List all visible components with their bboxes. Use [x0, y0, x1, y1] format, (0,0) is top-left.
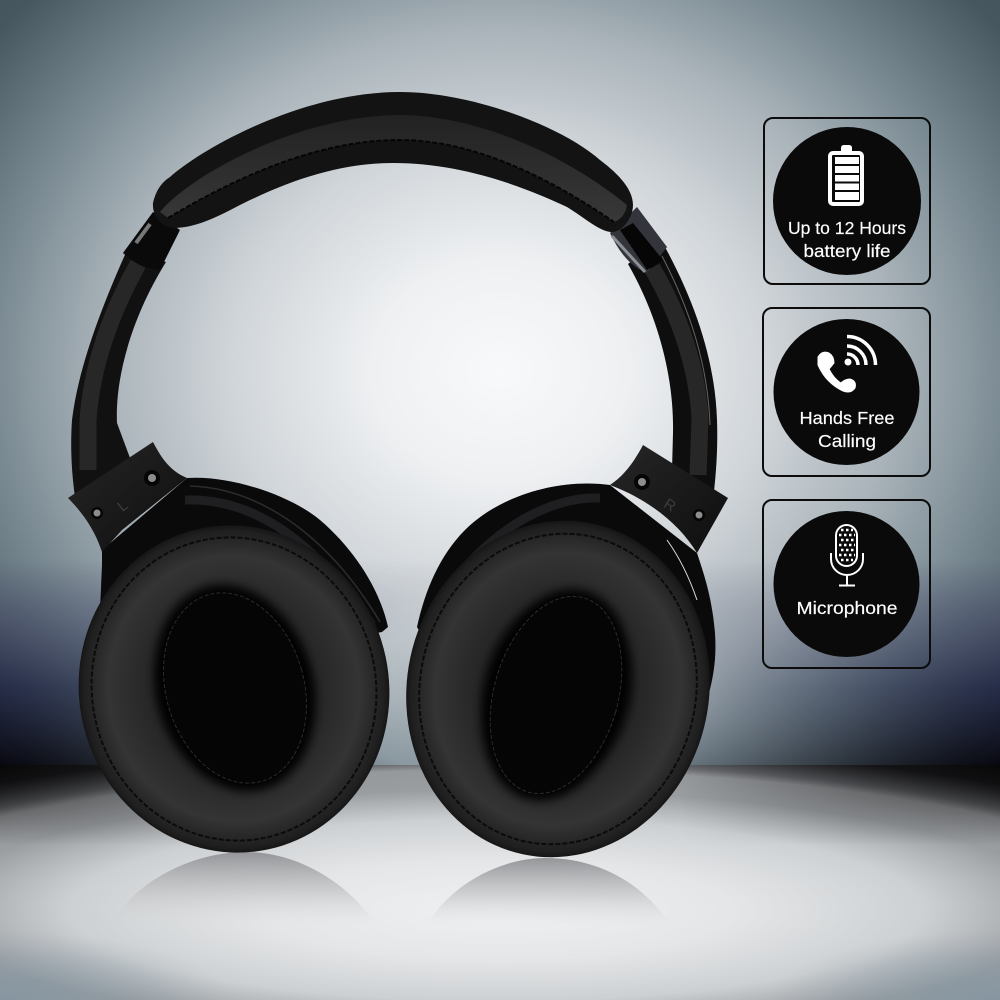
icon: phone with signal — [818, 336, 876, 392]
panel: battery life — [764, 118, 930, 284]
right arm — [628, 238, 717, 500]
label: battery: Up to 12 Hours — [788, 218, 906, 238]
left glossy slider — [123, 212, 180, 270]
label: microphone: Microphone — [796, 598, 898, 618]
left ear pad — [48, 496, 420, 882]
headband cushion — [153, 92, 633, 232]
label: hands free calling: Calling — [818, 431, 876, 451]
right shell — [417, 483, 715, 700]
right hinge: R — [661, 495, 679, 516]
icon: battery — [830, 145, 862, 204]
right ear pad — [375, 492, 741, 886]
right hinge — [610, 445, 728, 553]
right glossy slider — [610, 207, 667, 273]
left arm — [71, 248, 166, 497]
panel: hands free calling — [763, 308, 930, 476]
left shell — [100, 478, 388, 640]
background wall — [0, 0, 1000, 766]
icon: microphone — [831, 525, 863, 586]
reflective floor — [0, 765, 1000, 1000]
left earcup reflection — [112, 852, 376, 925]
panel: microphone — [763, 500, 930, 668]
left hinge — [68, 442, 187, 552]
label: hands free calling: Hands Free — [800, 408, 894, 428]
left hinge: L — [114, 497, 131, 515]
right earcup reflection — [427, 858, 670, 925]
headphones — [48, 92, 741, 886]
label: battery: battery life — [804, 241, 890, 261]
